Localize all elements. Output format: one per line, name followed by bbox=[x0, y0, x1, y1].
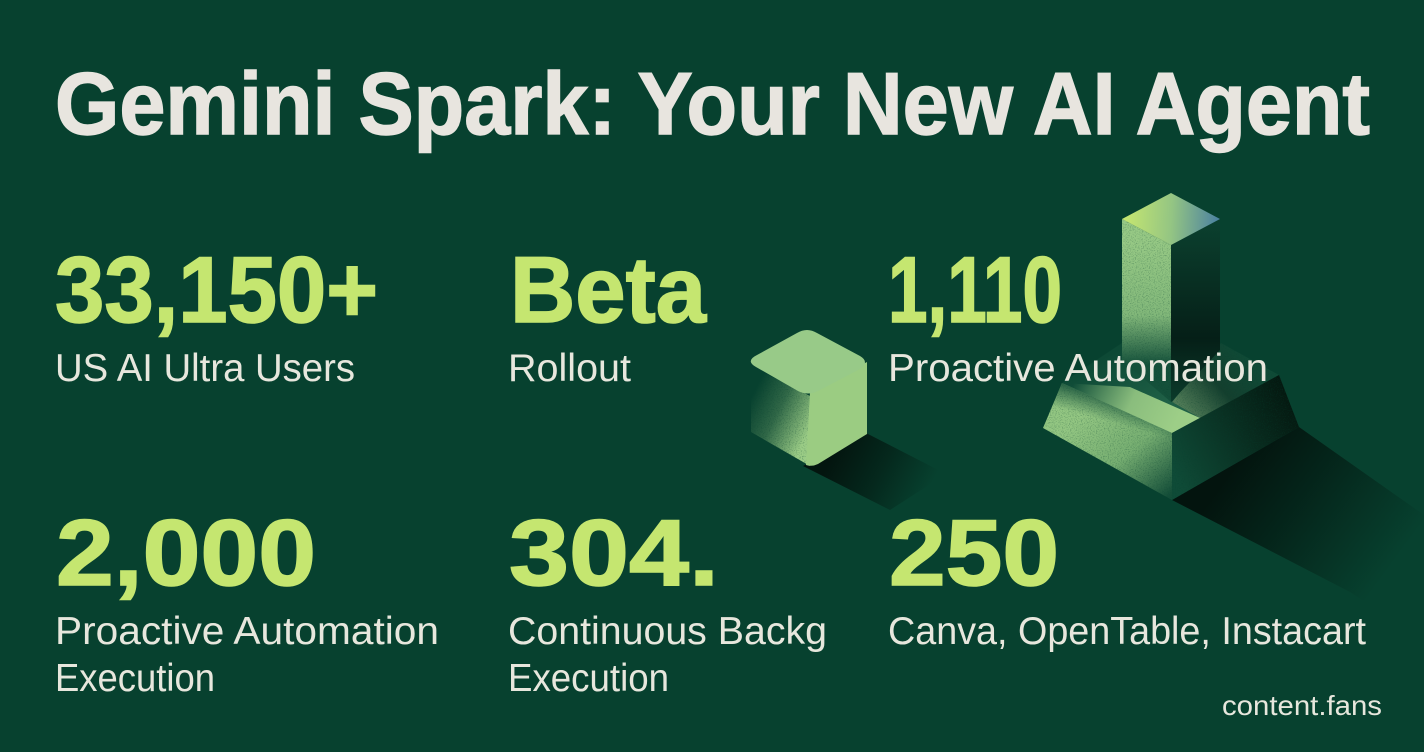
stat: integrations bbox=[888, 500, 1366, 653]
base left face upper fade bbox=[1043, 383, 1172, 440]
number: 304. bbox=[509, 500, 719, 605]
label line 1: Continuous Backg bbox=[508, 610, 827, 653]
label line 1: Proactive Automation bbox=[55, 610, 439, 653]
cube left face bbox=[751, 366, 810, 466]
cube shadow bbox=[803, 433, 946, 510]
label line 2: Execution bbox=[508, 657, 669, 700]
icon: small isometric cube bbox=[751, 330, 946, 510]
number: 250 bbox=[889, 500, 1059, 605]
stat: Proactive Automation Execution bbox=[55, 500, 439, 700]
label: Rollout bbox=[508, 347, 631, 390]
number: 2,000 bbox=[56, 500, 316, 605]
icon: isometric tower on a base bbox=[1043, 193, 1424, 640]
label: Canva, OpenTable, Instacart bbox=[888, 610, 1366, 653]
base top face back-left bbox=[1062, 343, 1200, 433]
stat: Continuous Background Execution bbox=[508, 500, 827, 700]
cube top face bbox=[751, 330, 865, 394]
stat: US AI Ultra Users bbox=[55, 237, 378, 390]
number: Beta bbox=[510, 237, 707, 342]
tower left face bbox=[1122, 219, 1171, 402]
base right face bbox=[1172, 375, 1299, 500]
tower right face bbox=[1171, 219, 1220, 402]
lit strip on base top bbox=[1062, 383, 1200, 433]
base left face bbox=[1043, 383, 1172, 500]
label: US AI Ultra Users bbox=[55, 347, 355, 390]
base top face right bbox=[1172, 343, 1279, 418]
number: 33,150+ bbox=[55, 237, 378, 342]
label line 2: Execution bbox=[55, 657, 215, 700]
number: 1,110 bbox=[888, 237, 1062, 342]
title: Gemini Spark: Your New AI Agent bbox=[55, 54, 1370, 153]
stat: Rollout bbox=[508, 237, 707, 390]
cube right face bbox=[806, 362, 867, 466]
tower shadow bbox=[1172, 427, 1424, 640]
stat: Proactive Automation bbox=[888, 237, 1268, 390]
source credit: content.fans bbox=[1222, 690, 1382, 721]
label: Proactive Automation bbox=[888, 347, 1268, 390]
tower top face bbox=[1122, 193, 1220, 245]
